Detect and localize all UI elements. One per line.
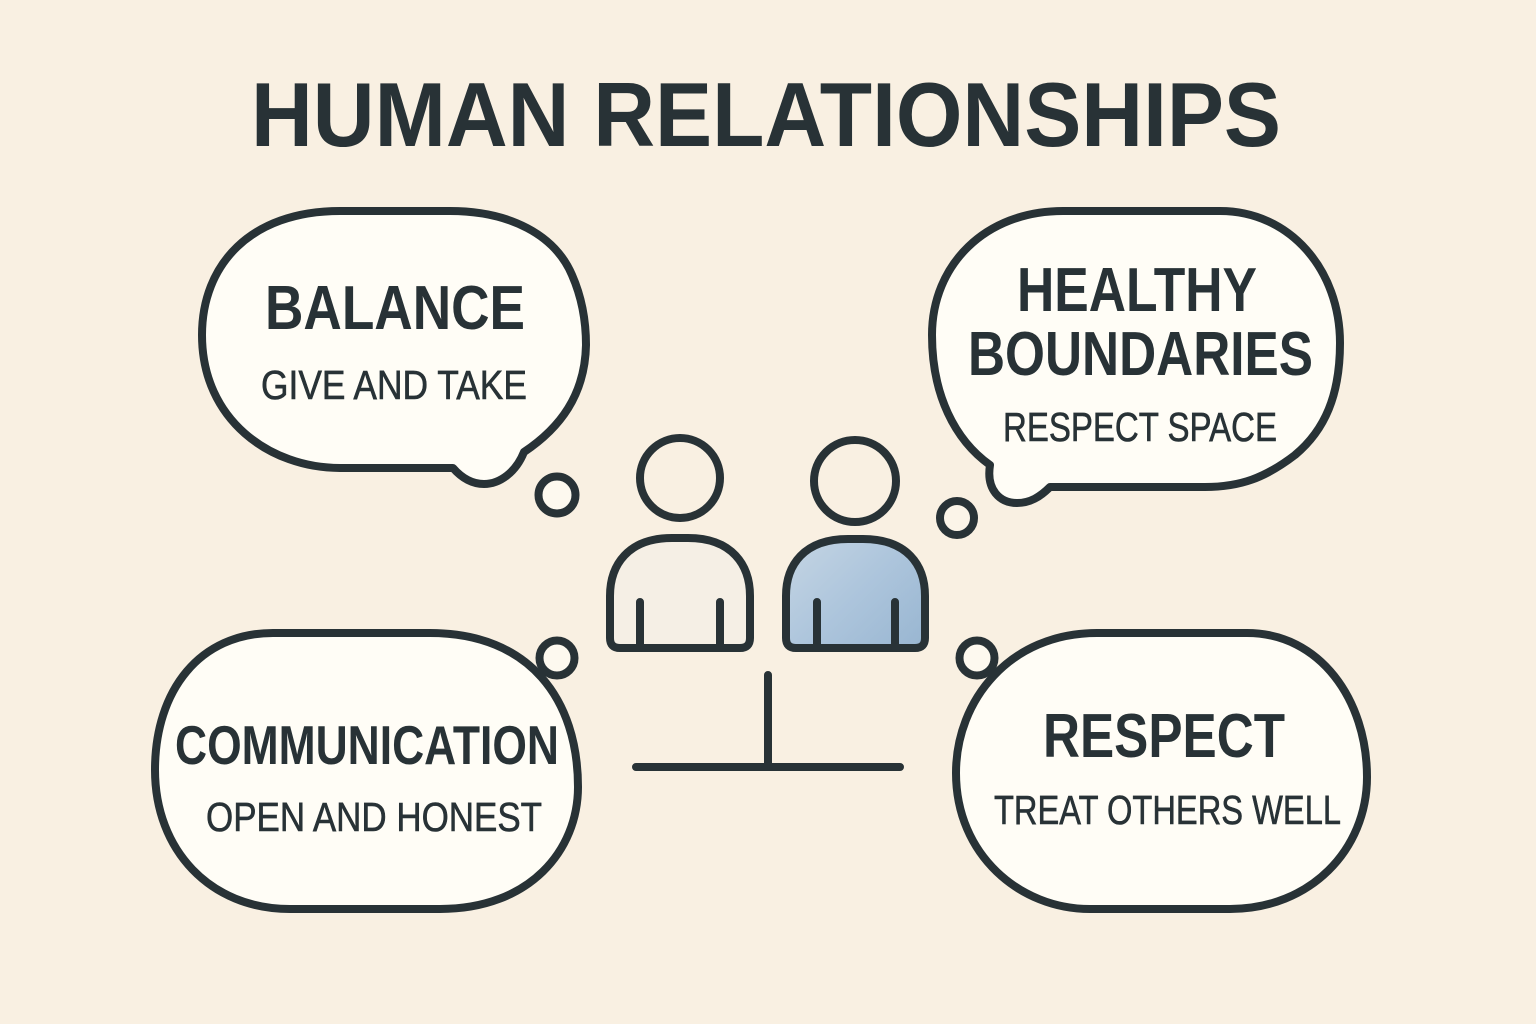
heading: healthy boundaries: HEALTHY: [1017, 256, 1257, 325]
bubble: communication: [155, 633, 578, 909]
bubble: healthy boundaries: [932, 211, 1340, 503]
panel: communication: [155, 633, 578, 909]
icon: right person: [786, 440, 925, 648]
text: treat others well: TREAT OTHERS WELL: [994, 787, 1341, 833]
heading: balance: BALANCE: [265, 274, 525, 343]
icon: left person: [610, 438, 750, 648]
thought dot: communication: [540, 640, 574, 676]
icon: connecting stand: [636, 675, 900, 767]
text: open and honest: OPEN AND HONEST: [206, 794, 542, 840]
text: give and take: GIVE AND TAKE: [261, 362, 527, 408]
heading: communication: COMMUNICATION: [175, 714, 559, 776]
bubble: respect: [956, 633, 1367, 909]
thought dot: healthy boundaries: [940, 501, 974, 535]
panel: balance: [202, 211, 586, 514]
heading: respect: RESPECT: [1043, 702, 1285, 771]
text: respect space: RESPECT SPACE: [1003, 404, 1277, 450]
thought dot: respect: [960, 640, 994, 676]
title: HUMAN RELATIONSHIPS: [251, 65, 1281, 166]
panel: respect: [956, 633, 1367, 909]
panel: healthy boundaries: [932, 211, 1340, 535]
bubble: balance: [202, 211, 586, 484]
thought dot: balance: [538, 476, 576, 514]
panel: healthy boundaries: BOUNDARIES: [968, 320, 1313, 389]
